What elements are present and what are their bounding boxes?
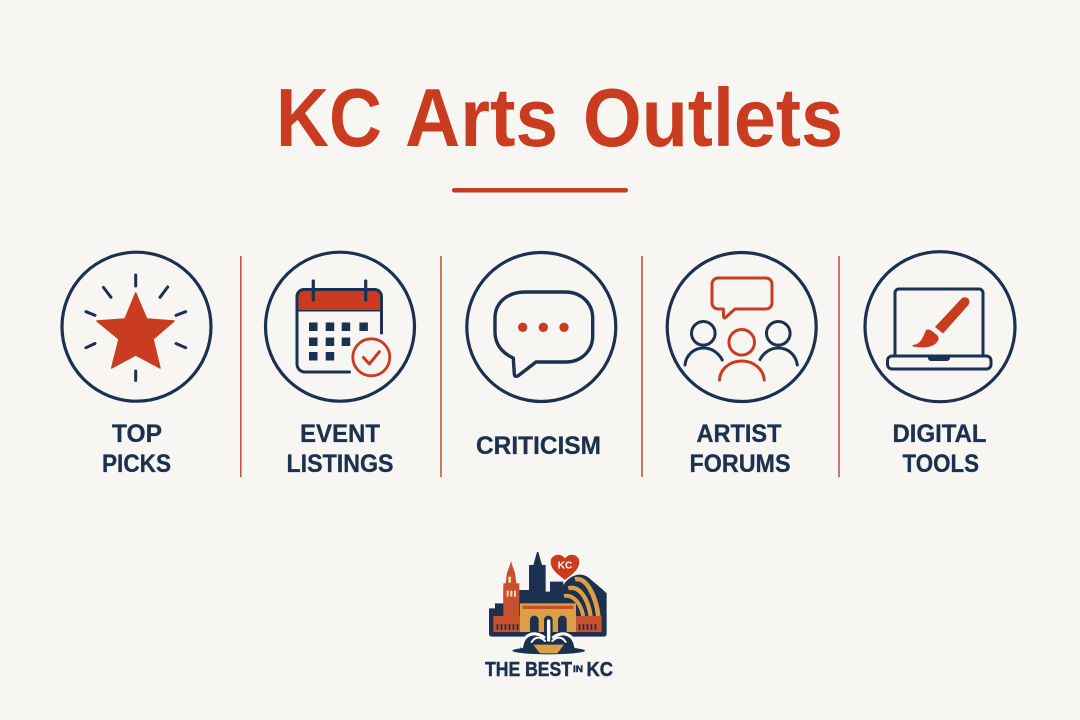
panel: top picks <box>62 252 211 478</box>
label: digital tools: DIGITAL <box>892 420 986 448</box>
logo skyline illustration: KC <box>558 560 572 571</box>
label: criticism: CRITICISM <box>476 432 601 460</box>
label: event listings: EVENT <box>300 420 380 448</box>
title: Outlets <box>583 71 843 164</box>
logo wordmark: IN <box>573 664 583 674</box>
icon: speech bubble in circle <box>467 252 616 402</box>
label: top picks: TOP <box>112 420 162 448</box>
logo: the best in kc <box>485 552 613 681</box>
logo wordmark: KC <box>586 658 613 681</box>
panel: criticism <box>467 252 616 460</box>
label: event listings: LISTINGS <box>286 450 394 478</box>
icon: calendar in circle <box>266 252 414 401</box>
icon: group with speech bubble in circle <box>667 252 816 402</box>
label: digital tools: TOOLS <box>902 450 979 478</box>
panel: event listings <box>266 252 414 478</box>
title: Arts <box>405 71 558 164</box>
panel: digital tools <box>865 252 1015 478</box>
label: artist forums: FORUMS <box>690 450 790 478</box>
logo wordmark: THE BEST <box>485 658 572 681</box>
title: KC <box>276 71 382 164</box>
label: top picks: PICKS <box>102 450 171 478</box>
title underline <box>452 188 628 192</box>
panel: artist forums <box>667 252 816 478</box>
icon: star in circle <box>62 252 211 401</box>
icon: laptop with paintbrush in circle <box>865 252 1015 402</box>
label: artist forums: ARTIST <box>696 420 782 448</box>
